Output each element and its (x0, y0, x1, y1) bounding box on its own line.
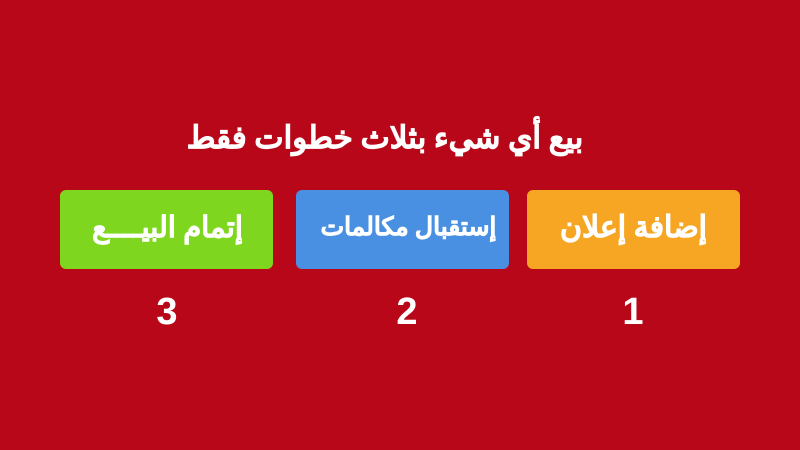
number 2: 2 (396, 291, 418, 333)
step 3 box (60, 190, 273, 269)
number 1: 1 (622, 291, 644, 333)
step 3 box: إتمام البيــــع (92, 212, 243, 244)
step 2 box (296, 190, 509, 269)
title: بيع أي شيء بثلاث خطوات فقط (187, 120, 583, 155)
step 2 box: إستقبال مكالمات (321, 214, 496, 241)
step 1 box: إضافة إعلان (560, 211, 707, 244)
number 3: 3 (156, 291, 178, 333)
step 1 box (527, 190, 740, 269)
